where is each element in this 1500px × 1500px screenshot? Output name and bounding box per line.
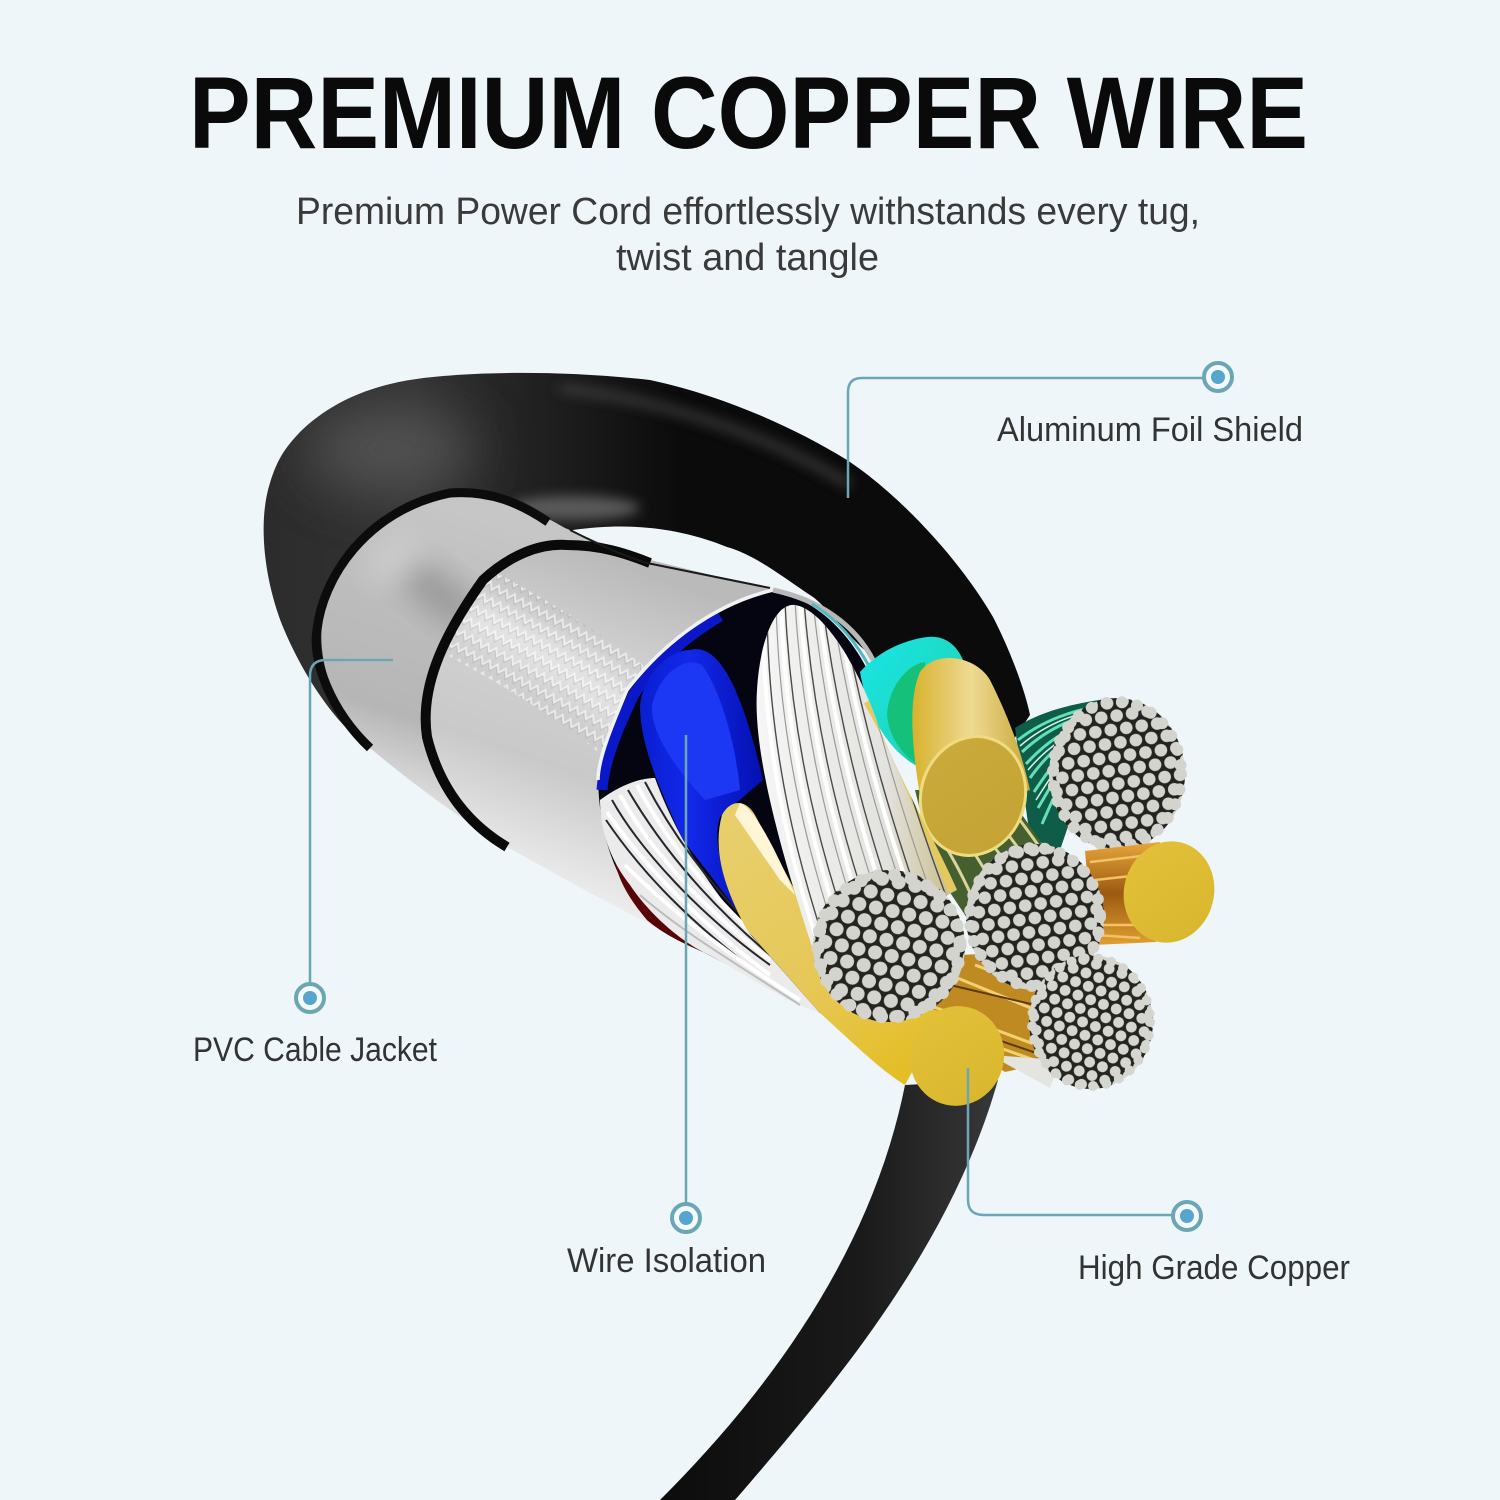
right gold wire	[1085, 832, 1225, 952]
blue insulated wire	[640, 649, 763, 923]
teal insulated wire collar	[860, 637, 965, 770]
grey jacket band	[321, 497, 601, 821]
mid green and gold strands	[915, 790, 1060, 930]
subtitle: Premium Power Cord effortlessly withstands every tug,	[296, 191, 1200, 233]
tube top edge line	[570, 530, 770, 588]
label: PVC Cable Jacket	[193, 1031, 437, 1069]
marker	[672, 1204, 700, 1232]
cable lower black section	[660, 1080, 998, 1500]
label: Aluminum Foil Shield	[997, 411, 1303, 449]
lower copper strands	[900, 950, 1070, 1088]
cable illustration	[264, 373, 1225, 1500]
middle silver strand ends	[966, 844, 1104, 990]
main silver bundle	[757, 600, 957, 965]
label: Wire Isolation	[567, 1242, 766, 1280]
lower silver strand ends	[1029, 955, 1153, 1089]
callout: wire isolation	[567, 735, 766, 1280]
right green strands	[1015, 698, 1115, 850]
right top silver strand ends	[1049, 698, 1185, 850]
callout: pvc cable jacket	[193, 660, 437, 1069]
long gold wire	[719, 803, 945, 1085]
top gold wire	[906, 658, 1040, 868]
bottom gold wire end	[899, 996, 1015, 1116]
title: PREMIUM COPPER WIRE	[189, 56, 1308, 170]
cable upper black loop	[264, 373, 1030, 760]
marker	[296, 984, 324, 1012]
jacket ring 2	[426, 545, 650, 847]
subtitle	[296, 191, 1200, 279]
label: High Grade Copper	[1078, 1249, 1350, 1287]
cable opening	[598, 590, 880, 1013]
main silver strand ends	[813, 870, 965, 1022]
left silver strands	[600, 778, 820, 1013]
marker	[1204, 363, 1232, 391]
foil shield section	[426, 543, 773, 952]
jacket ring 1	[316, 493, 548, 748]
callout: aluminum foil shield	[848, 363, 1303, 498]
marker	[1173, 1202, 1201, 1230]
callout: high grade copper	[968, 1068, 1350, 1287]
subtitle: twist and tangle	[616, 237, 879, 279]
